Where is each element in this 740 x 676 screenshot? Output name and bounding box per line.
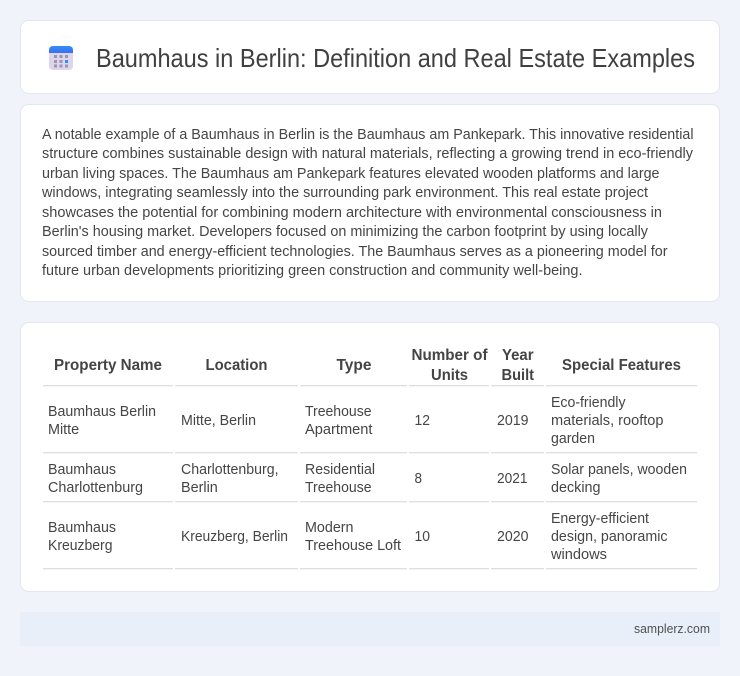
table header row (43, 347, 697, 386)
table row: Baumhaus Charlottenburg: Solar panels, wooden (551, 462, 687, 478)
table row: Baumhaus Charlottenburg: Charlottenburg, (181, 462, 278, 478)
table row: Baumhaus Kreuzberg: Baumhaus (48, 520, 116, 536)
footer text: samplerz.com: samplerz.com (634, 621, 710, 636)
table row: Baumhaus Kreuzberg: 2020 (497, 529, 528, 545)
table row: Baumhaus Charlottenburg: 2021 (497, 471, 528, 487)
text block: description paragraph: structure combines sustainable design with natural materials, reflecting a growing trend in eco-friendly (42, 146, 694, 162)
table row: Baumhaus Kreuzberg: 10 (414, 529, 430, 545)
text block: description paragraph: future urban developments prioritizing green construction and community well-being. (42, 263, 582, 279)
table row: Baumhaus Kreuzberg: Kreuzberg, Berlin (181, 529, 288, 545)
table row: Baumhaus Berlin Mitte: Baumhaus Berlin (48, 404, 156, 420)
table header row: Units (431, 367, 468, 384)
table header row: Number of (412, 347, 488, 364)
icon: calendar (49, 46, 73, 70)
table header row: Built (502, 367, 535, 384)
table row: Baumhaus Kreuzberg: design, panoramic (551, 529, 668, 545)
table row: Baumhaus Charlottenburg: Treehouse (305, 480, 372, 496)
table row: Baumhaus Charlottenburg (43, 462, 697, 502)
table row: Baumhaus Charlottenburg: decking (551, 480, 600, 496)
table row: Baumhaus Berlin Mitte (43, 395, 697, 453)
table row: Baumhaus Berlin Mitte: Apartment (305, 422, 372, 438)
header panel (20, 20, 720, 94)
text block: description paragraph: showcases the potential for combining modern architecture with environmental consciousness in (42, 205, 662, 221)
table row: Baumhaus Kreuzberg: windows (550, 547, 607, 563)
table row: Baumhaus Kreuzberg: Treehouse Loft (305, 538, 401, 554)
footer bar (20, 612, 720, 646)
table row: Baumhaus Berlin Mitte: 12 (414, 413, 430, 429)
table row: Baumhaus Kreuzberg: Kreuzberg (48, 538, 112, 554)
text block: description paragraph: urban living spaces. The Baumhaus am Pankepark features elevated wooden platforms and large (42, 166, 660, 182)
table row: Baumhaus Berlin Mitte: Treehouse (305, 404, 372, 420)
title: Baumhaus in Berlin: Definition and Real Estate Examples (96, 45, 695, 73)
table row: Baumhaus Berlin Mitte: Mitte, Berlin (181, 413, 256, 429)
text block: description paragraph: Berlin's housing market. Developers focused on minimizing the carbon footprint by using locally (42, 224, 649, 240)
table row: Baumhaus Berlin Mitte: garden (551, 431, 595, 447)
table row: Baumhaus Charlottenburg: Residential (305, 462, 375, 478)
panel: property table (20, 322, 720, 592)
table row: Baumhaus Berlin Mitte: materials, rooftop (551, 413, 664, 429)
table row: Baumhaus Charlottenburg: 8 (414, 471, 422, 487)
table header row: Property Name (54, 357, 162, 374)
table row: Baumhaus Berlin Mitte: Eco-friendly (551, 395, 626, 411)
table header row: Special Features (562, 357, 681, 374)
table header row: Year (502, 347, 534, 364)
table row: Baumhaus Charlottenburg: Baumhaus (48, 462, 116, 478)
table row: Baumhaus Berlin Mitte: Mitte (48, 422, 79, 438)
text block: description paragraph: sourced timber and energy-efficient technologies. The Baumhaus serves as a pioneering model for (42, 244, 668, 260)
table header row: Location (206, 357, 268, 374)
table row: Baumhaus Charlottenburg: Charlottenburg (48, 480, 143, 496)
table row: Baumhaus Kreuzberg: Energy-efficient (551, 511, 649, 527)
table header row: Type (336, 357, 372, 374)
text block: description paragraph: A notable example of a Baumhaus in Berlin is the Baumhaus am Pankepark. This innovative residential (42, 127, 694, 143)
text block: description paragraph: windows, integrating seamlessly into the surrounding park environment. This real estate project (41, 185, 648, 201)
table row: Baumhaus Charlottenburg: Berlin (181, 480, 218, 496)
table row: Baumhaus Kreuzberg: Modern (305, 520, 354, 536)
table row: Baumhaus Berlin Mitte: 2019 (497, 413, 528, 429)
panel: description (20, 104, 720, 302)
table row: Baumhaus Kreuzberg (43, 511, 697, 569)
text block: description paragraph (41, 127, 694, 279)
